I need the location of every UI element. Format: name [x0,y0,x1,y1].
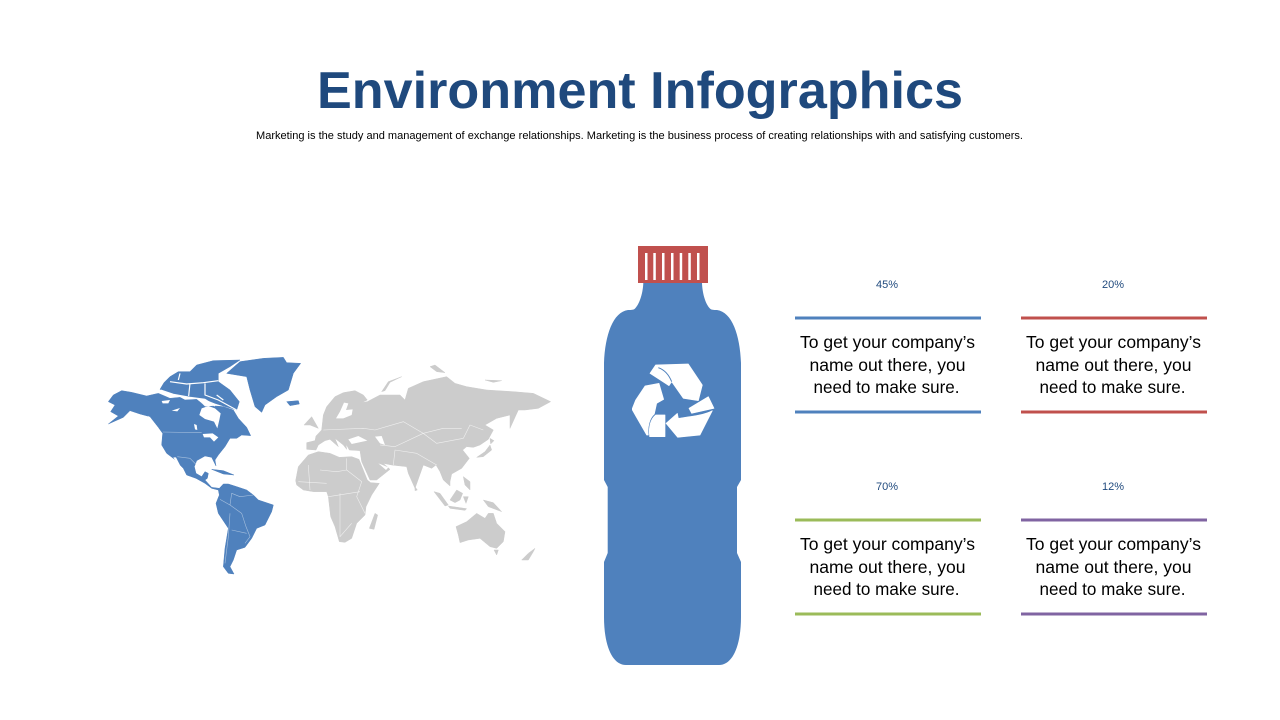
panel: 70% [795,481,981,616]
title: Environment Infographics [317,62,963,120]
body text: need to make sure. [814,579,960,599]
body text: need to make sure. [1040,377,1186,397]
panel: 12% [1021,481,1207,616]
body text: To get your company’s [800,332,975,352]
bottle cap [638,246,708,283]
percentage: 12%: 12% [1102,481,1124,493]
body text: To get your company’s [800,534,975,554]
body text: need to make sure. [1040,579,1186,599]
divider top [795,518,981,522]
percentage: 70%: 70% [876,481,898,493]
body text: name out there, you [1036,355,1192,375]
body text [800,332,975,397]
divider bottom [1021,410,1207,414]
map: Americas and Greenland [108,357,301,574]
panel: 20% [1021,279,1207,414]
divider top [1021,518,1207,522]
map: arctic channels [161,373,237,410]
percentage: 20%: 20% [1102,279,1124,291]
divider bottom [795,612,981,616]
map: inland seas [336,403,388,470]
body text: need to make sure. [814,377,960,397]
body text: name out there, you [810,355,966,375]
bottle body [604,283,741,665]
body text: To get your company’s [1026,534,1201,554]
panel: 45% [795,279,981,414]
body text [1026,332,1201,397]
map: Hudson Bay and lake cut-outs [162,400,221,468]
divider bottom [795,410,981,414]
map: Eurasia, Africa and Oceania [296,365,551,560]
map: American borders [148,416,253,563]
bottle [604,246,741,665]
body text [800,534,975,599]
subtitle: Marketing is the study and management of exchange relationships. Marketing is the business process of creating relationships with and satisfying customers. [256,130,1023,142]
world map [108,357,551,574]
percentage: 45%: 45% [876,279,898,291]
icon: recycling symbol [632,364,714,437]
body text: name out there, you [1036,557,1192,577]
divider top [1021,316,1207,320]
divider bottom [1021,612,1207,616]
body text: name out there, you [810,557,966,577]
body text [1026,534,1201,599]
map: Old World borders [298,422,483,537]
body text: To get your company’s [1026,332,1201,352]
divider top [795,316,981,320]
